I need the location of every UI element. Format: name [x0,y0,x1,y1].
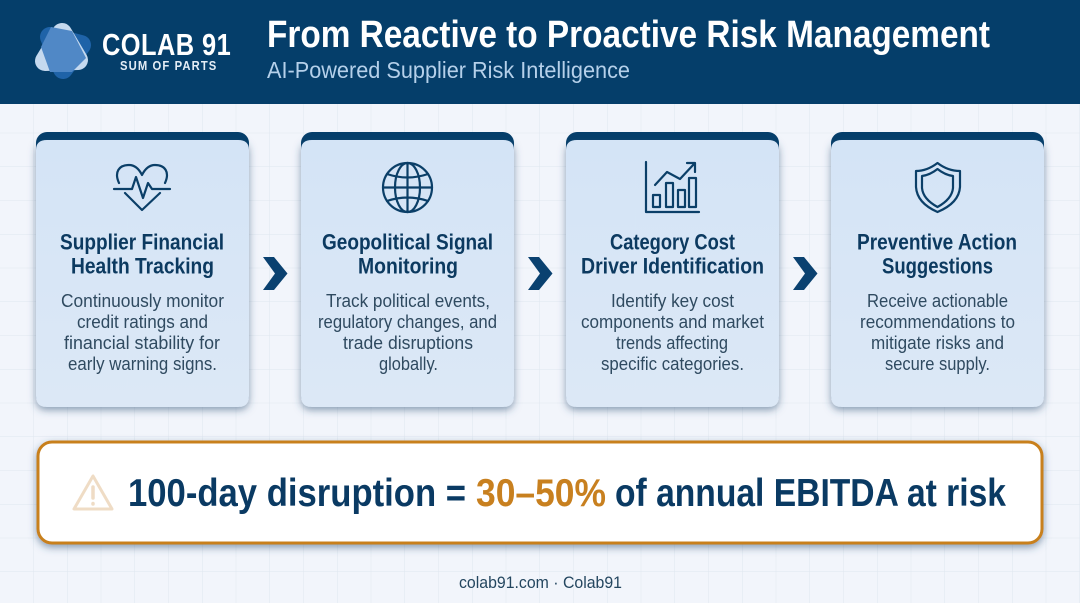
description [61,291,224,374]
icon: shield [916,163,960,212]
footer: colab91.com · Colab91 [459,574,622,592]
heading: Geopolitical Signal [322,230,493,254]
icon: bar chart with trend arrow [646,162,699,212]
arrow 3 [793,257,818,290]
description: Track political events, [326,291,490,311]
description: Receive actionable [867,291,1008,311]
heading: Suggestions [882,254,993,278]
callout text [128,472,1006,515]
heading: Health Tracking [71,254,214,278]
description: mitigate risks and [871,333,1004,353]
callout text: 100-day disruption = [128,472,466,515]
description: trends affecting [616,333,728,353]
description [581,291,764,374]
heading [60,230,224,278]
icon: heart with pulse [114,165,170,210]
heading: Category Cost [610,230,736,254]
heading: Monitoring [358,254,458,278]
logo icon [41,27,86,72]
description: specific categories. [601,354,744,374]
panel: supplier financial health tracking [36,132,249,407]
description: regulatory changes, and [318,312,497,332]
logo wordmark: SUM OF PARTS [120,58,216,73]
heading [322,230,493,278]
description [318,291,497,374]
panel: geopolitical signal monitoring [301,132,514,407]
heading: Driver Identification [581,254,764,278]
subtitle: AI-Powered Supplier Risk Intelligence [267,57,630,83]
description: Continuously monitor [61,291,224,311]
description [860,291,1015,374]
description: financial stability for [64,333,220,353]
header band [0,0,1080,104]
heading: Supplier Financial [60,230,224,254]
callout: EBITDA at risk [38,442,1042,543]
icon: warning triangle [74,476,112,509]
description: Identify key cost [611,291,734,311]
description: early warning signs. [68,354,217,374]
logo wordmark: COLAB 91 [102,28,231,63]
description: components and market [581,312,764,332]
description: trade disruptions [343,333,473,353]
arrow 2 [528,257,552,290]
heading [857,230,1017,278]
description: recommendations to [860,312,1015,332]
title: From Reactive to Proactive Risk Management [267,14,990,56]
description: credit ratings and [77,312,208,332]
arrow 1 [263,257,288,290]
icon: globe [383,163,432,212]
panel: category cost driver identification [566,132,779,407]
heading [581,230,764,278]
callout text: of annual EBITDA at risk [615,472,1006,515]
callout text: 30–50% [476,472,606,515]
panel: preventive action suggestions [831,132,1044,407]
heading: Preventive Action [857,230,1017,254]
description: secure supply. [885,354,990,374]
description: globally. [379,354,438,374]
